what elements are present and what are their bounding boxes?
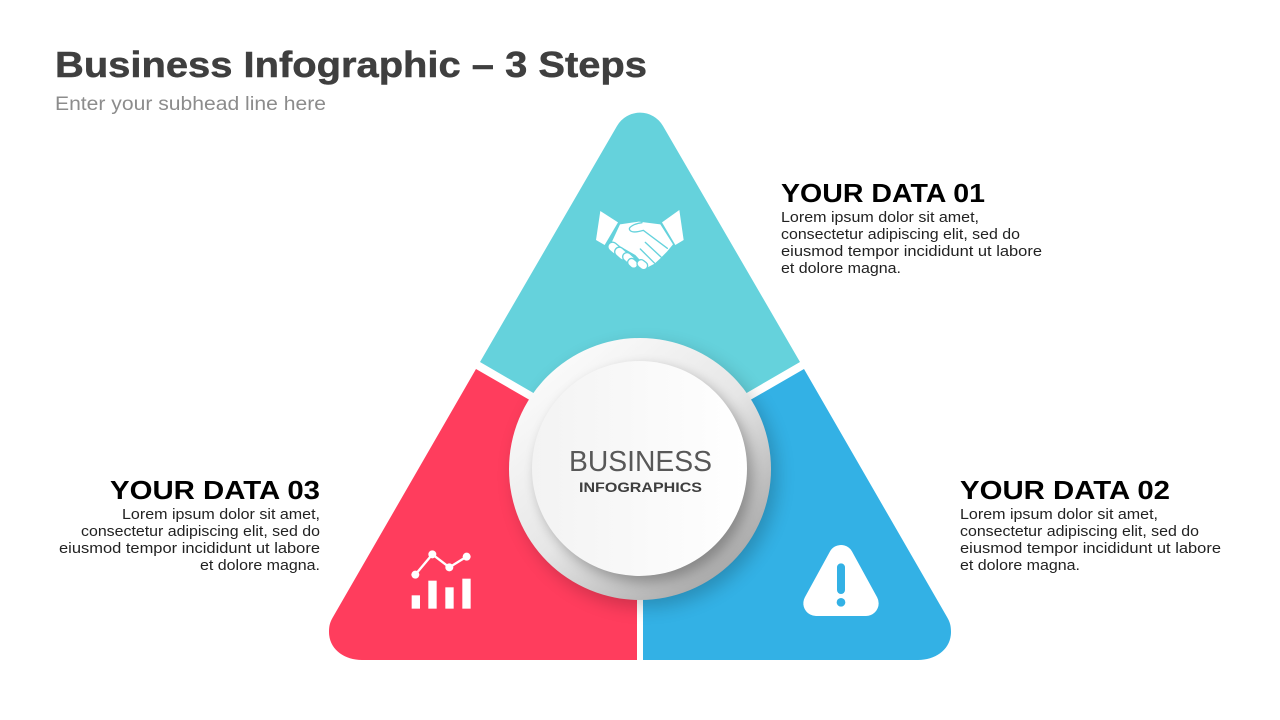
text block: your data 01: YOUR DATA 01 <box>781 178 985 208</box>
triangle diagram <box>329 113 951 660</box>
segment: blue bottom right <box>643 369 951 660</box>
center label: INFOGRAPHICS <box>579 479 702 495</box>
text block: your data 03: eiusmod tempor incididunt ut labore <box>59 541 320 557</box>
center circle <box>509 338 777 607</box>
icon: bar and line chart <box>411 550 471 609</box>
text block: your data 03: consectetur adipiscing elit, sed do <box>81 524 320 540</box>
title: Business Infographic – 3 Steps <box>55 44 647 85</box>
text block: your data 03 <box>59 475 320 574</box>
text block: your data 01: consectetur adipiscing elit, sed do <box>781 227 1020 243</box>
text block: your data 02: Lorem ipsum dolor sit amet, <box>960 507 1158 523</box>
text block: your data 01: eiusmod tempor incididunt ut labore <box>781 244 1042 260</box>
text block: your data 01 <box>781 178 1042 277</box>
center label: BUSINESS <box>569 446 712 478</box>
text block: your data 02: consectetur adipiscing elit, sed do <box>960 524 1199 540</box>
text block: your data 01: et dolore magna. <box>781 261 901 277</box>
icon: handshake <box>596 210 684 271</box>
text block: your data 03: YOUR DATA 03 <box>110 475 320 505</box>
text block: your data 02 <box>960 475 1221 574</box>
text block: your data 03: et dolore magna. <box>200 558 320 574</box>
text block: your data 03: Lorem ipsum dolor sit amet, <box>122 507 320 523</box>
subhead: Enter your subhead line here <box>55 94 326 115</box>
text block: your data 02: eiusmod tempor incididunt ut labore <box>960 541 1221 557</box>
text block: your data 01: Lorem ipsum dolor sit amet, <box>781 210 979 226</box>
center label <box>569 446 712 495</box>
segment: red bottom left <box>329 369 637 660</box>
icon: warning triangle <box>816 558 866 607</box>
text block: your data 02: YOUR DATA 02 <box>960 475 1170 505</box>
text block: your data 02: et dolore magna. <box>960 558 1080 574</box>
segment: teal top <box>480 113 800 420</box>
